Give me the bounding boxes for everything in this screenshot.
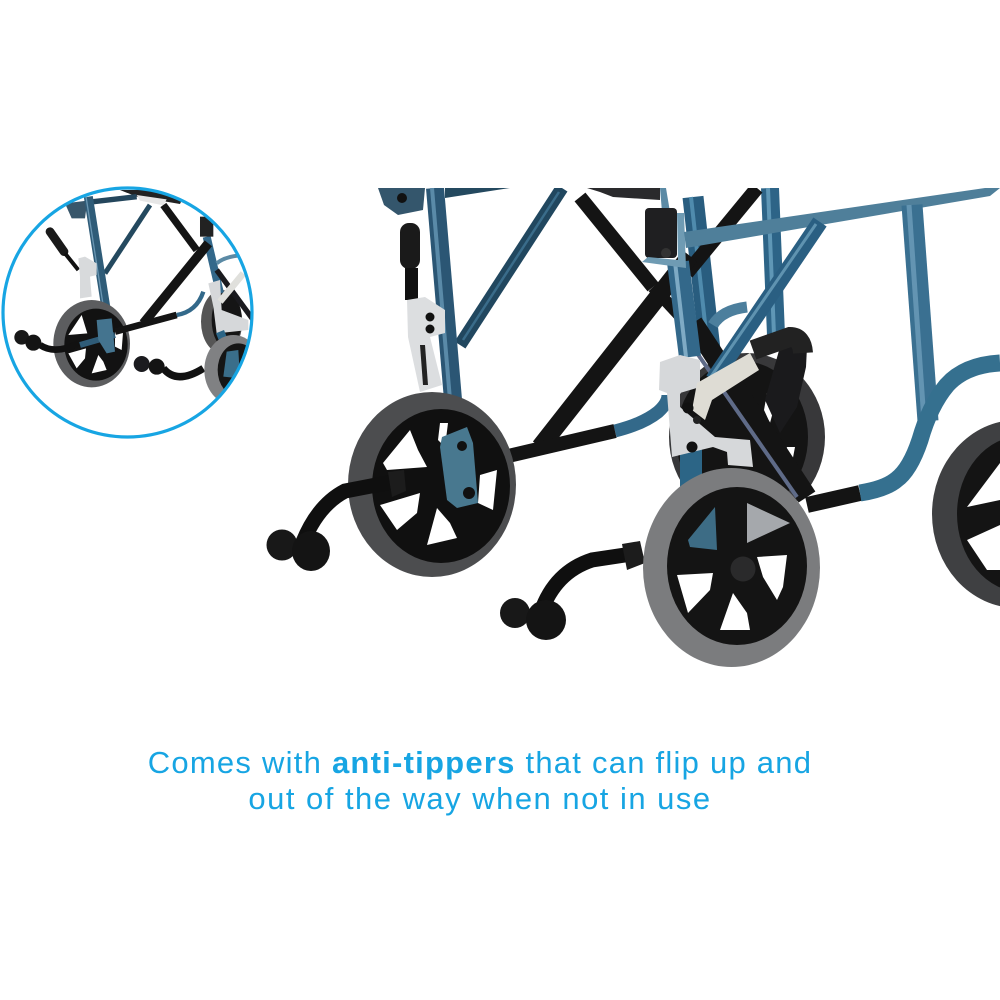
top rail and hinge housing — [642, 188, 1000, 268]
lower curved tube — [860, 363, 1000, 493]
folding lever handle — [753, 337, 807, 433]
right wheel — [643, 468, 820, 667]
inset: left anti-tipper — [14, 330, 65, 353]
black frame bars — [500, 188, 860, 505]
blue frame tubes — [426, 188, 785, 438]
right clamp upright — [675, 262, 691, 492]
inset: rear wheel — [201, 290, 242, 353]
inset: brake handle — [50, 232, 78, 270]
left brake clamp — [407, 297, 445, 392]
caption — [148, 745, 812, 816]
left brake handle — [400, 223, 420, 300]
diagonal brace — [710, 222, 820, 380]
seat underside — [587, 188, 660, 200]
illustration: wheelchair rear with anti-tippers — [1, 186, 1000, 667]
caption: out of the way when not in use — [248, 781, 712, 816]
caption: Comes with anti-tippers that can flip up and — [148, 745, 812, 780]
inset circle: anti-tippers detail — [3, 188, 262, 437]
vertical post — [909, 205, 928, 421]
inset: blue ring — [3, 188, 252, 437]
inset: right clamp and lever — [208, 273, 248, 340]
far right wheel — [932, 420, 1000, 608]
inset: brake clamp — [78, 257, 97, 298]
top left bracket — [378, 188, 510, 215]
inset: axle and bracket — [80, 315, 177, 353]
left wheel — [348, 392, 516, 577]
right anti-tipper — [500, 541, 645, 640]
inset: left wheel — [53, 300, 130, 387]
left anti-tipper — [266, 470, 406, 571]
inset: blue frame — [84, 196, 238, 318]
left wheel bracket — [440, 427, 478, 508]
inset: front wheel — [204, 335, 248, 398]
right brake clamp — [659, 353, 759, 467]
inset: top left bracket — [65, 197, 137, 218]
inset: right anti-tipper — [134, 356, 203, 377]
inset: seat underside — [120, 190, 187, 204]
inset: black frame — [143, 205, 253, 323]
far rear wheel — [669, 353, 825, 501]
